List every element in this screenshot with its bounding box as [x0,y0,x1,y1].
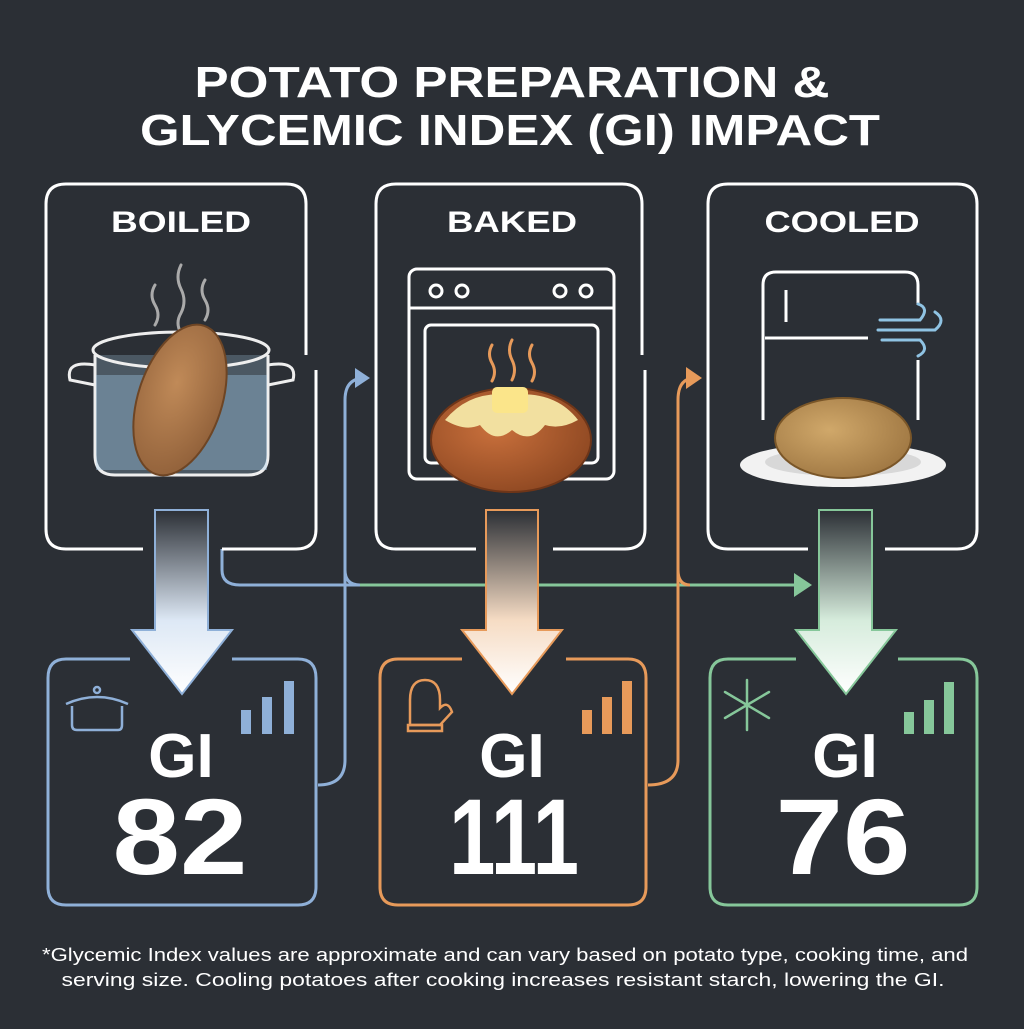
heading: cooled: COOLED [764,206,920,239]
footnote: serving size. Cooling potatoes after cooking increases resistant starch, lowering the GI. [62,970,944,990]
card: boiled GI: 82 [112,776,248,897]
icon: bars [904,682,954,734]
icon: baked potato [431,340,591,492]
arrow: boiled down [132,510,232,694]
panel: baked [376,184,645,549]
heading: baked: BAKED [447,206,577,239]
heading: boiled: BOILED [111,206,251,239]
icon: snowflake [725,680,769,730]
footnote [42,945,968,990]
icon: oven [409,269,614,479]
card: cooled GI: 76 [776,776,910,897]
title: GLYCEMIC INDEX (GI) IMPACT [140,106,880,155]
footnote: *Glycemic Index values are approximate and can vary based on potato type, cooking time, and [42,945,968,965]
arrow: baked down [462,510,562,694]
icon: oven mitt [408,680,452,731]
card: boiled GI: GI [148,722,214,791]
title [140,58,880,155]
icon: steam [152,265,208,333]
icon: pot with potato [69,313,294,487]
card: baked GI [380,659,646,905]
title: POTATO PREPARATION & [194,58,829,107]
icon: bars [241,681,294,734]
card: baked GI: GI [479,722,545,791]
icon: pot [66,687,128,730]
panel: boiled [46,184,316,549]
connector lines [222,378,800,785]
card: boiled GI [48,659,316,905]
card: cooled GI: GI [812,722,878,791]
icon: wind [878,304,941,356]
card: baked GI: 111 [449,776,579,897]
icon: bars [582,681,632,734]
arrow: cooled down [796,510,896,694]
icon: plate with potato [740,398,946,487]
icon: fridge [763,272,918,420]
card: cooled GI [710,659,977,905]
panel: cooled [708,184,977,549]
arrowheads of connectors [355,367,812,597]
